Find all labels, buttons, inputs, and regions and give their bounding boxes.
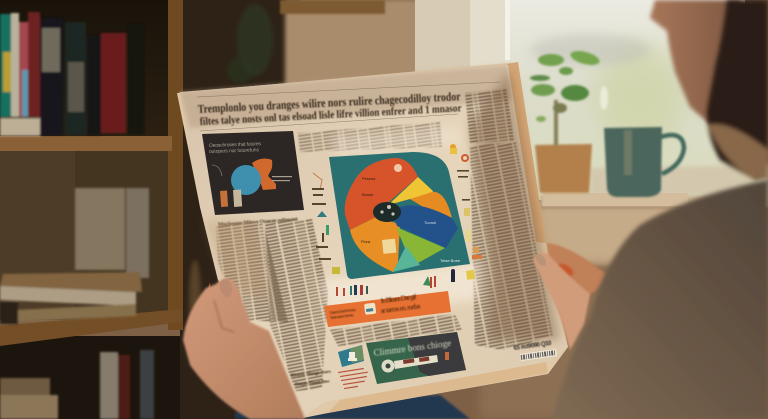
dark centre hub [373, 202, 401, 222]
segment labels: Flora [361, 239, 371, 244]
window sill and wall below [480, 165, 768, 419]
paper sheet [177, 62, 568, 418]
books middle shelf [0, 188, 149, 324]
segment labels: Bousb [362, 192, 374, 197]
green climate banner [366, 332, 466, 384]
banner text: Darens Dionh Mossa [330, 308, 356, 315]
banner icon [364, 303, 376, 315]
lower left subhead: Duspes Mauet Bow [295, 379, 330, 388]
dark infographic panel: Oeoschroses that futures [209, 141, 262, 149]
banner text: In Bleans Dae gif [380, 293, 418, 305]
headline [197, 89, 462, 128]
segment labels: Pessna [362, 176, 376, 181]
finger behind paper [205, 282, 212, 316]
right orange segment [410, 192, 452, 218]
upper page shade [180, 65, 512, 128]
people pictogram row [336, 285, 368, 296]
shelf boards and post [0, 0, 183, 346]
dark infographic panel [202, 131, 304, 215]
red segment [345, 158, 418, 230]
red caption under icon [338, 368, 368, 389]
sweater [552, 180, 768, 419]
window [415, 0, 745, 200]
segment labels [361, 176, 461, 263]
teal panel background [329, 152, 470, 279]
blue circle [231, 165, 261, 195]
orange banner [324, 291, 451, 327]
thumbnail [534, 252, 548, 268]
price and barcode [513, 341, 557, 361]
right pictogram row [423, 269, 475, 288]
woman's face [650, 0, 740, 130]
white map mark in red segment [394, 164, 402, 172]
lower center text strip [330, 314, 462, 346]
hub icons [380, 205, 395, 216]
left side mini icons [312, 173, 340, 274]
blue and green puzzle icon [338, 345, 364, 367]
small bars [220, 191, 228, 207]
pie chart panel [329, 152, 470, 279]
bookshelf [0, 0, 183, 419]
right hand holding the paper [533, 243, 606, 350]
yellow segment [388, 177, 433, 205]
lower orange segment [350, 216, 400, 272]
green segment [396, 227, 445, 263]
woman's hair [707, 0, 768, 180]
masthead rule [197, 82, 500, 97]
headline: filtes talye nosts onl tas elsoad lisle lifre villion enfrer and 1 mnasor [200, 102, 462, 128]
houseplant in background corner [189, 4, 273, 340]
price and barcode: €5 #ct9090 Q10 [513, 341, 553, 352]
banner text [330, 293, 421, 320]
segment labels: Tuonol [424, 220, 436, 225]
banner text: ar tarms en. rurfas [380, 302, 421, 315]
blue jeans [235, 395, 470, 419]
dark infographic panel: outopers nar futurefuns [209, 147, 260, 155]
beige note square [382, 239, 396, 254]
thumb shadow [214, 300, 234, 332]
bright bottom strip [328, 362, 548, 413]
page surface [180, 65, 568, 415]
window plant and pot [530, 48, 608, 193]
left text column two [265, 219, 328, 391]
shadows and sunlight on page [205, 70, 560, 340]
books top shelf [0, 12, 144, 136]
left text column one [216, 222, 288, 322]
plant leaves [530, 48, 608, 146]
fingers behind paper [547, 243, 606, 345]
intro text above chart [298, 122, 442, 152]
right text column upper [465, 88, 514, 144]
palm and thumb [183, 279, 305, 419]
thumb [533, 253, 590, 350]
newspaper [177, 62, 568, 418]
banner text: Toefa tuanor Bonse [330, 313, 354, 320]
right side mini icons [450, 144, 482, 259]
thumbnail [218, 278, 234, 298]
climate banner heading: Climmre bons chioge [373, 339, 452, 359]
light teal segment [393, 246, 420, 272]
left column subhead: Muclosuon Miteve Oraean sufteoant [218, 216, 298, 228]
barcode [520, 349, 557, 361]
lower left subhead [291, 370, 331, 388]
plant pot [535, 144, 592, 193]
red glow between fingers [555, 261, 575, 279]
blue segment [392, 205, 458, 248]
segment labels: Totse Boee [440, 258, 461, 263]
right text column [470, 142, 553, 350]
headline: Tremplonlo you dranges wilire nors rulire chagecodilloy trodor [197, 89, 461, 116]
left hand holding the paper [183, 278, 305, 419]
green mug [604, 127, 684, 197]
key graphic [382, 352, 449, 372]
head silhouette [252, 159, 276, 190]
lower left subhead: Bisnoe Mosge Boes [291, 370, 331, 379]
back page cream strip [507, 62, 546, 243]
books bottom shelf [0, 350, 154, 419]
